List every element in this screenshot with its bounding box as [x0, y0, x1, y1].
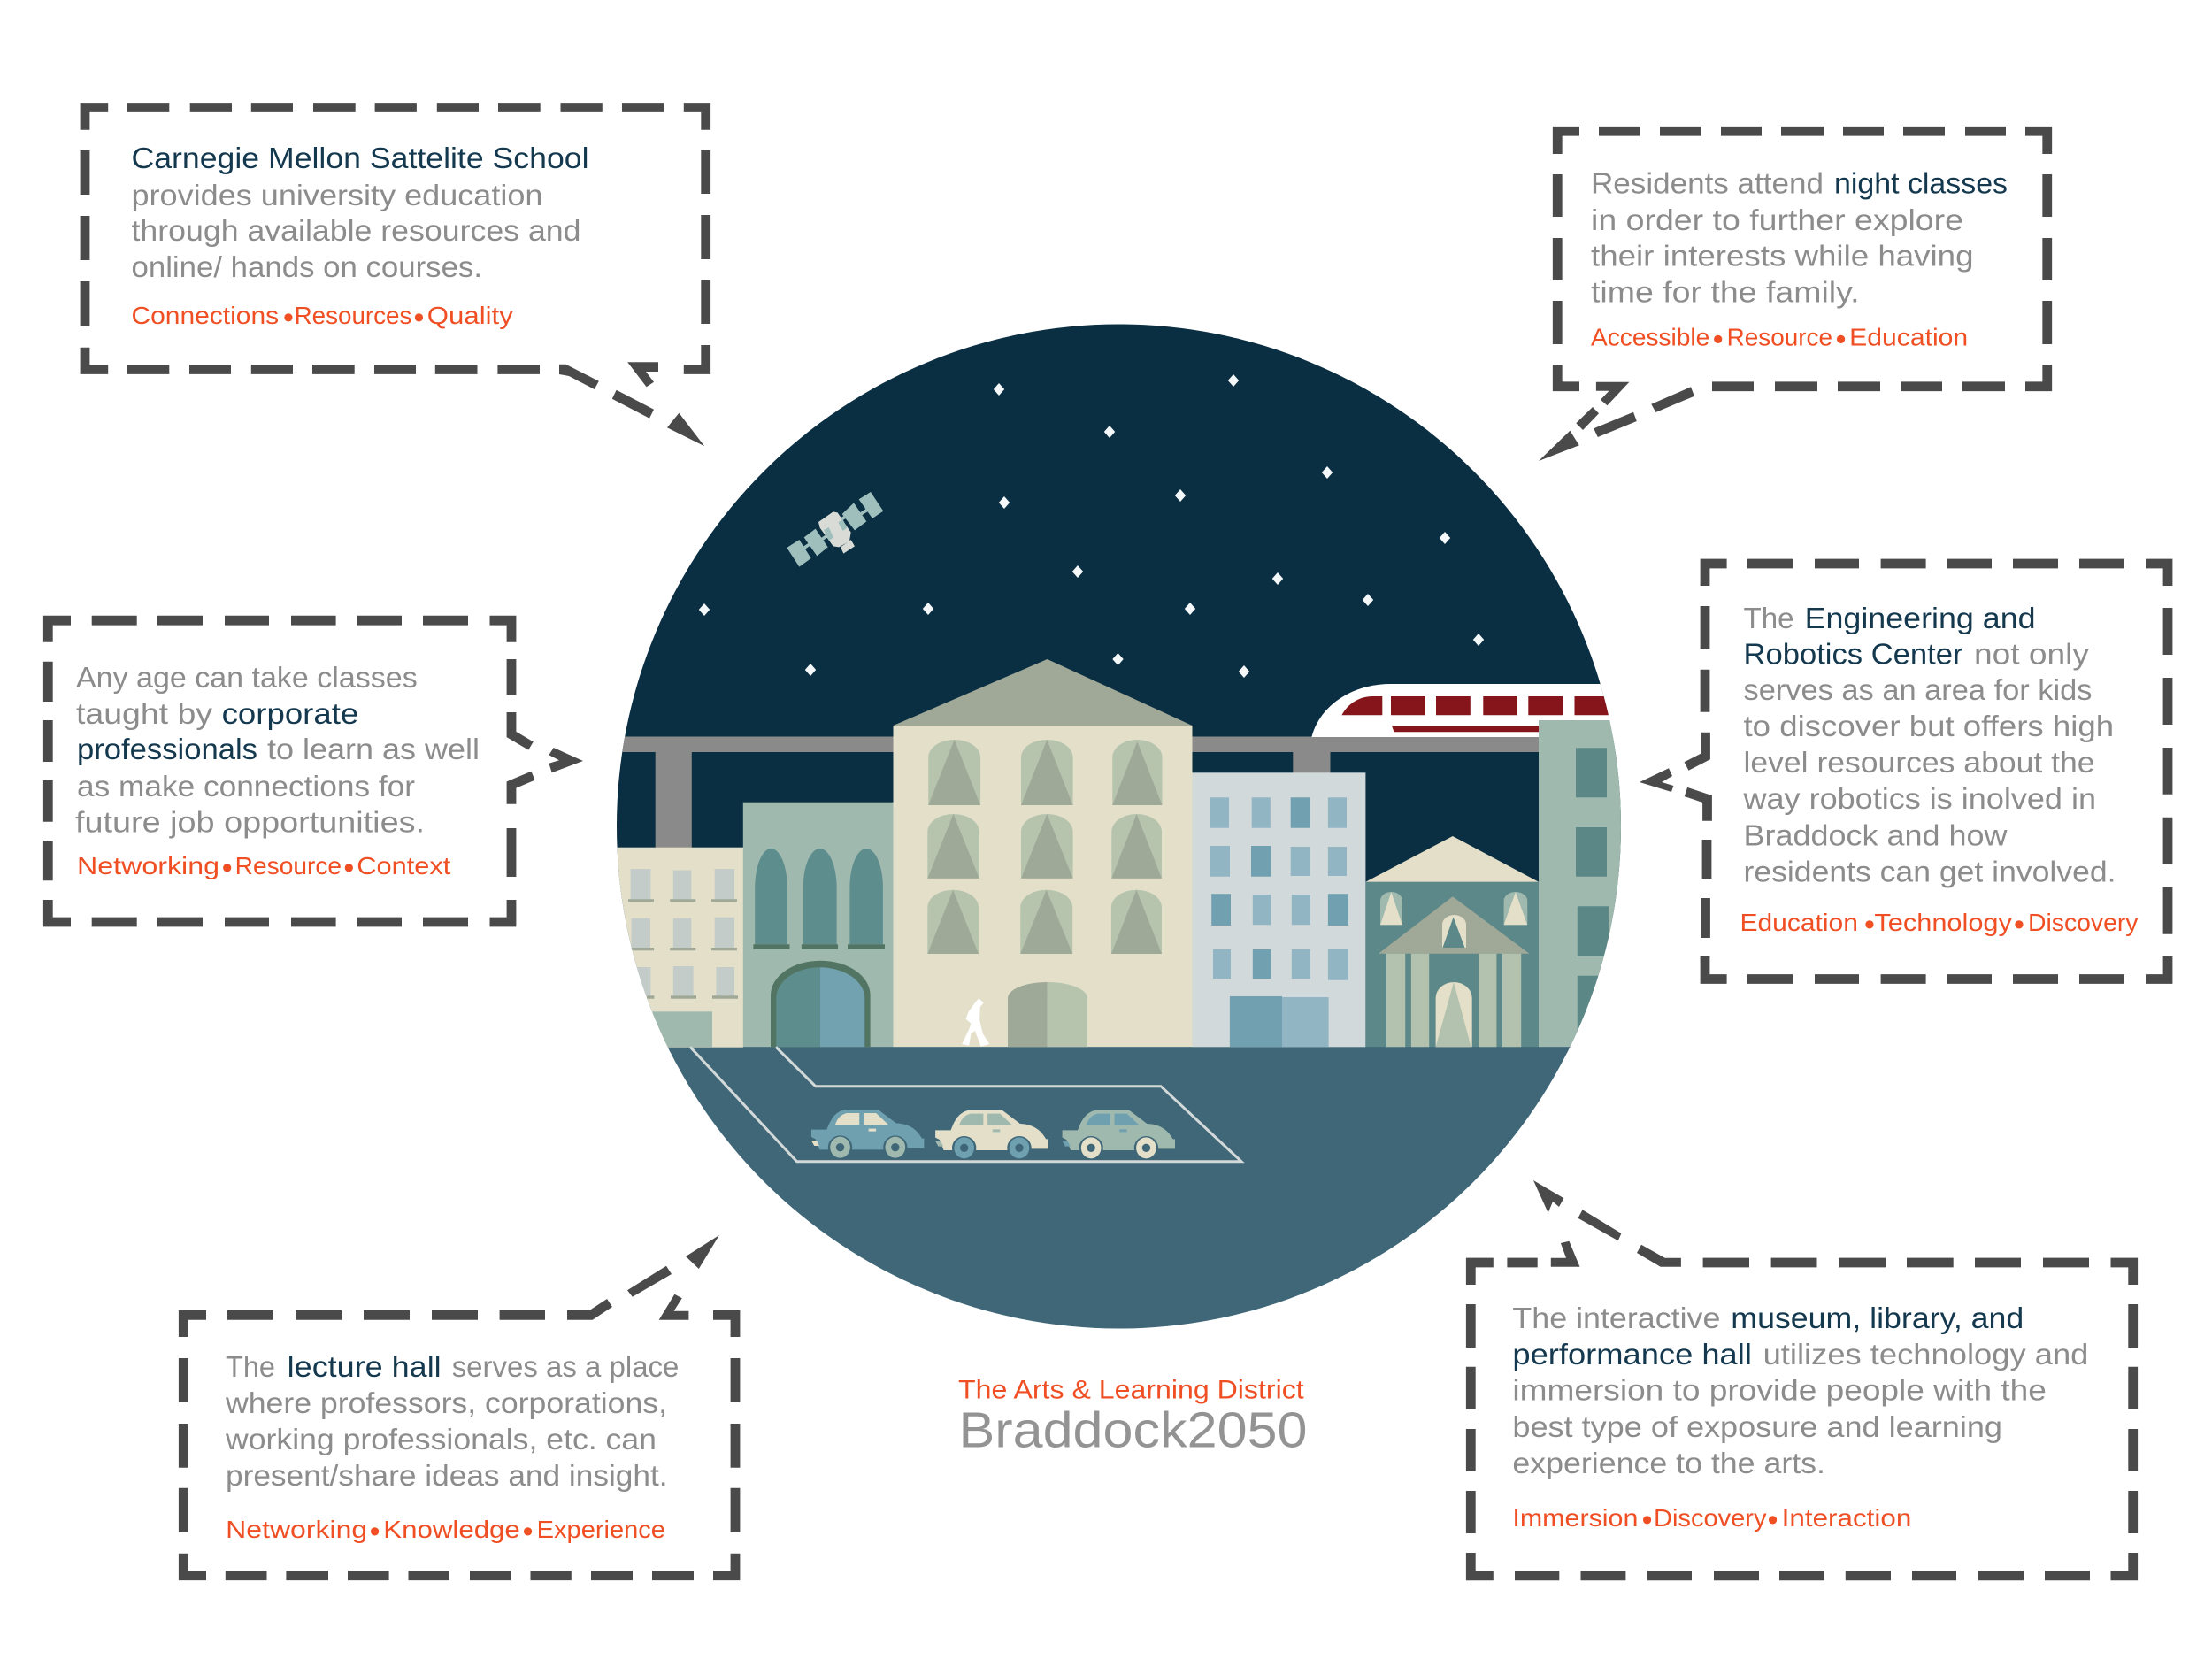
night sky [611, 319, 1628, 1053]
dashed speech-bubble frame [85, 108, 706, 370]
callout text: to learn as well [267, 733, 480, 765]
callout text: • [2014, 908, 2024, 941]
callout text: • [1642, 1503, 1653, 1537]
callout text [1512, 1302, 2088, 1537]
callout text: Any age can take classes [76, 661, 418, 694]
callout text: where professors, corporations, [225, 1386, 667, 1419]
dashed speech-bubble frame [1471, 1263, 2133, 1576]
callout text: Interaction [1782, 1504, 1911, 1532]
callout text: Context [357, 852, 451, 879]
callout text: performance hall [1512, 1338, 1752, 1371]
title block [958, 1376, 1308, 1459]
arrow pointing to scene [1640, 768, 1673, 792]
callout text: • [413, 301, 424, 334]
callout text: in order to further explore [1591, 204, 1963, 236]
callout text: The interactive [1512, 1302, 1720, 1334]
callout text: provides university education [131, 179, 543, 211]
dashed speech-bubble frame [183, 1302, 735, 1576]
arrow pointing to scene [559, 362, 704, 446]
callout text: Resource [235, 852, 342, 879]
callout text: serves as an area for kids [1743, 673, 2092, 706]
callout: Engineering and Robotics Center [1640, 564, 2168, 979]
callout text: Discovery [1654, 1504, 1766, 1532]
callout text: best type of exposure and learning [1512, 1410, 2002, 1443]
building: central hall [894, 659, 1193, 1047]
callout text [75, 661, 480, 885]
callout text: • [1713, 323, 1724, 357]
callout text: immersion to provide people with the [1512, 1374, 2047, 1407]
callout text: level resources about the [1743, 746, 2095, 779]
callout text: not only [1974, 638, 2090, 671]
arrow pointing to scene [1539, 382, 1694, 461]
callout text: lecture hall [288, 1350, 442, 1383]
building: cream apartments, left [611, 848, 743, 1048]
ground [667, 1047, 1570, 1329]
callout text: corporate [222, 697, 358, 730]
title: Braddock2050 [959, 1402, 1308, 1459]
subtitle: The Arts & Learning District [958, 1376, 1304, 1405]
callout text: experience to the arts. [1512, 1447, 1825, 1479]
callout text: their interests while having [1591, 240, 1973, 273]
callout text: Resource [1727, 324, 1832, 351]
callout text: Residents attend [1591, 167, 1824, 200]
callout text: Networking [226, 1516, 367, 1543]
callout text: Engineering and [1805, 602, 2036, 634]
callout text: Accessible [1591, 324, 1709, 351]
callout text: • [1836, 323, 1847, 357]
dashed speech-bubble frame [48, 620, 534, 922]
callout: Carnegie Mellon Satellite School [85, 108, 706, 446]
callout text: professionals [77, 733, 257, 765]
building: tall tower, right [1539, 720, 1627, 1047]
callout text: utilizes technology and [1763, 1338, 2088, 1371]
callout text: Networking [77, 852, 219, 879]
callout text: taught by [76, 697, 213, 730]
building: grey-blue office [1192, 772, 1365, 1047]
callout text: • [370, 1515, 380, 1548]
callout: corporate professionals [48, 620, 583, 922]
callout text: • [1768, 1503, 1778, 1537]
icon: walking person [962, 998, 989, 1047]
callout text: serves as a place [452, 1350, 679, 1383]
callout text: The [1743, 602, 1794, 634]
callout: night classes [1539, 131, 2047, 461]
callout text: Technology [1874, 909, 2012, 936]
callout: museum, library and performance hall [1471, 1180, 2133, 1576]
callout text: Braddock and how [1743, 819, 2008, 852]
arrow pointing to scene [549, 748, 583, 772]
callout text: present/share ideas and insight. [226, 1459, 668, 1492]
building: church with pediment [1365, 836, 1539, 1047]
callout text: • [222, 851, 233, 885]
parking lot outline [690, 1047, 1241, 1162]
callout text: museum, library, and [1731, 1302, 2024, 1334]
callout text: online/ hands on courses. [131, 250, 482, 283]
callout text: • [283, 301, 294, 334]
callout text: through available resources and [131, 214, 580, 247]
callout: lecture hall [183, 1235, 735, 1576]
elevated rail bridge [611, 736, 1557, 854]
callout text: • [1864, 908, 1875, 941]
callout text: to discover but offers high [1743, 710, 2114, 742]
callout text: • [523, 1515, 534, 1548]
icon: green car [1063, 1110, 1175, 1160]
callout text: Connections [131, 302, 279, 329]
callout text: working professionals, etc. can [225, 1423, 657, 1455]
callout text: Experience [537, 1516, 665, 1543]
callout text: as make connections for [77, 770, 415, 803]
stars [699, 374, 1484, 678]
callout text [1740, 602, 2138, 941]
building: teal arcade [743, 803, 894, 1047]
callout text: Discovery [2028, 909, 2138, 936]
callout text: Education [1849, 324, 1968, 351]
monorail train [1311, 684, 1637, 737]
callout text: night classes [1834, 167, 2008, 200]
arrow pointing to scene [627, 1235, 719, 1320]
callout text: Education [1740, 909, 1858, 936]
callout text: Quality [427, 302, 513, 329]
icon: cream car [935, 1110, 1048, 1160]
callout text: residents can get involved. [1743, 856, 2116, 888]
icon: satellite [787, 492, 883, 567]
illustration: circular city night scene [611, 319, 1637, 1339]
callout text: future job opportunities. [75, 806, 425, 839]
callout text: time for the family. [1591, 276, 1860, 309]
dashed speech-bubble frame [1557, 131, 2047, 387]
callout text [225, 1350, 679, 1548]
icon: blue car [811, 1110, 924, 1159]
callout text: way robotics is inolved in [1742, 782, 2096, 815]
callout text: The [226, 1350, 275, 1383]
arrow pointing to scene [1533, 1180, 1681, 1267]
callout text: Immersion [1512, 1504, 1638, 1532]
callout text [131, 142, 589, 334]
callout text: • [343, 851, 354, 885]
callout text: Knowledge [383, 1516, 520, 1543]
callout text: Resources [295, 302, 411, 329]
dashed speech-bubble frame [1686, 564, 2168, 979]
icon: cars [811, 1110, 1175, 1160]
callout text [1591, 167, 2008, 357]
callout text: Robotics Center [1743, 638, 1963, 671]
callout text: Carnegie Mellon Sattelite School [131, 142, 589, 174]
